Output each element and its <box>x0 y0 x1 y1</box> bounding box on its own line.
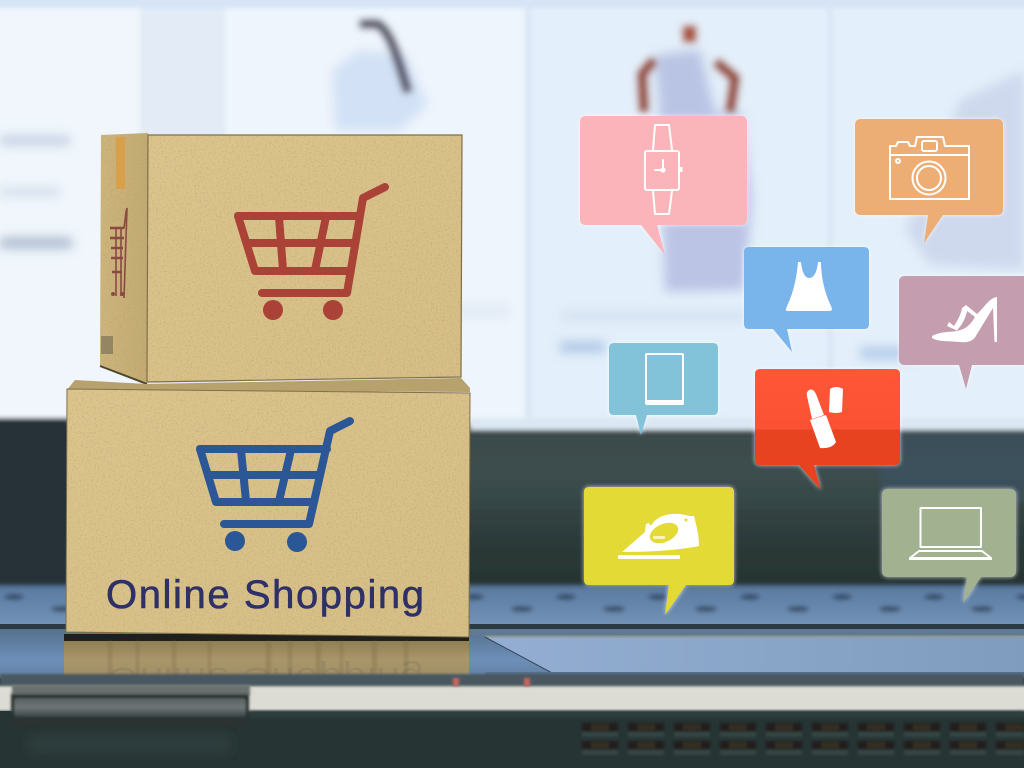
icon: red shopping cart <box>238 187 385 320</box>
icon: camera <box>890 137 969 199</box>
bubble: laptop <box>882 489 1016 603</box>
icon: watch <box>645 125 682 214</box>
icon: high-heel shoe <box>932 297 997 342</box>
background: laptop palm rest and trackpad <box>0 629 1024 681</box>
box reflection <box>64 634 469 698</box>
box front panel <box>66 389 470 637</box>
bubble: high-heel shoe <box>899 276 1024 389</box>
box reflection: Online Shopping <box>106 660 424 698</box>
bubble: dress <box>744 247 869 352</box>
icon: clothes iron <box>618 514 699 559</box>
bubble: iron <box>584 487 734 615</box>
bubble: tablet <box>609 343 718 435</box>
icon: dress <box>786 262 832 311</box>
box: top with red cart <box>100 133 462 384</box>
box: bottom with blue cart <box>66 378 470 637</box>
icon: tablet <box>646 354 683 405</box>
label: Online Shopping: Online Shopping <box>106 573 424 617</box>
box top strip <box>67 378 470 392</box>
icon: lipstick <box>807 387 843 448</box>
box side panel <box>100 133 148 384</box>
laptop lower edge <box>0 674 1024 768</box>
bubble: camera <box>855 119 1003 243</box>
bubble: lipstick <box>755 369 900 490</box>
box front panel <box>147 135 462 382</box>
icon: laptop <box>909 508 992 560</box>
background: keyboard edge line <box>0 624 1024 629</box>
bubble: watch <box>580 116 747 255</box>
icon: blue shopping cart <box>200 421 350 552</box>
silver strip <box>0 686 1024 711</box>
